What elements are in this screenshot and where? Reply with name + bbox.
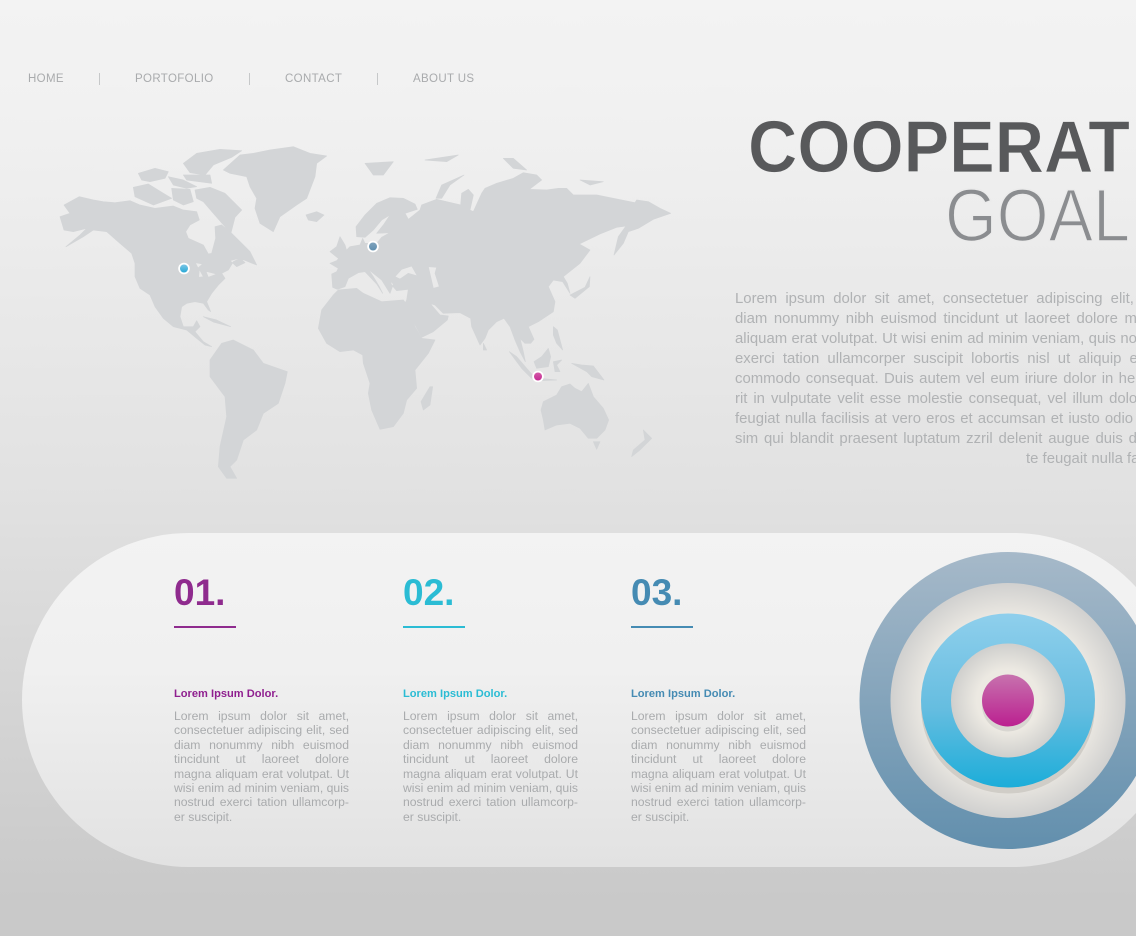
- body 02: diam nonummy nibh euismod: [403, 738, 578, 752]
- marker: Indonesia: [532, 371, 544, 382]
- Southeast Asian islands: [509, 327, 604, 381]
- body 03: [631, 709, 806, 824]
- body 02: wisi enim ad minim veniam, quis: [403, 781, 578, 795]
- body 03: diam nonummy nibh euismod: [631, 738, 806, 752]
- body 03: wisi enim ad minim veniam, quis: [631, 781, 806, 795]
- body 03: tincidunt ut laoreet dolore: [631, 752, 806, 766]
- body 03: Lorem ipsum dolor sit amet,: [631, 709, 806, 723]
- body 01: Lorem ipsum dolor sit amet,: [174, 709, 349, 723]
- world map: [60, 146, 671, 478]
- body 02: consectetuer adipiscing elit, sed: [403, 723, 578, 737]
- body 03: consectetuer adipiscing elit, sed: [631, 723, 806, 737]
- body 03: magna aliquam erat volutpat. Ut: [631, 767, 806, 781]
- outer blue-grey ring: [860, 552, 1136, 849]
- body 01: diam nonummy nibh euismod: [174, 738, 349, 752]
- Australia: [541, 383, 609, 449]
- UK and Ireland: [330, 237, 348, 258]
- Arctic Eurasian islands: [365, 155, 603, 198]
- body 01: [174, 709, 349, 824]
- heading 03: Lorem Ipsum Dolor.: [631, 688, 735, 700]
- centre magenta dot: [982, 674, 1034, 726]
- number 03: 03.: [631, 572, 682, 613]
- Greenland: [223, 147, 327, 232]
- blue ring: [921, 614, 1095, 788]
- nav item: home: HOME: [28, 73, 64, 85]
- underline 02: [403, 626, 465, 628]
- underline 03: [631, 626, 693, 628]
- number 02: 02.: [403, 572, 454, 613]
- nav item: contact: CONTACT: [285, 73, 342, 85]
- heading 01: Lorem Ipsum Dolor.: [174, 688, 278, 700]
- Eurasia: [330, 173, 671, 362]
- step 02: [403, 572, 578, 824]
- body 01: magna aliquam erat volutpat. Ut: [174, 767, 349, 781]
- body 02: magna aliquam erat volutpat. Ut: [403, 767, 578, 781]
- body 03: er suscipit.: [631, 810, 689, 824]
- New Zealand: [632, 430, 652, 457]
- body 01: consectetuer adipiscing elit, sed: [174, 723, 349, 737]
- nav separator: [377, 73, 378, 85]
- South America: [210, 340, 287, 478]
- continents: Europe, Asia, Africa, Oceania: [318, 155, 671, 457]
- panel: steps pill: [22, 533, 1136, 867]
- underline 01: [174, 626, 236, 628]
- navigation bar: [28, 73, 474, 85]
- step 01: [174, 572, 349, 824]
- marker: Europe: [367, 241, 379, 252]
- body 02: er suscipit.: [403, 810, 461, 824]
- North America: [60, 197, 257, 347]
- intro paragraph: [735, 290, 1136, 466]
- continents: Americas: [60, 147, 327, 478]
- inner cream ring: [951, 644, 1065, 758]
- body 02: [403, 709, 578, 824]
- nav item: about us: ABOUT US: [413, 73, 474, 85]
- nav separator: [249, 73, 250, 85]
- centre dot shadow: [982, 680, 1034, 732]
- body 02: Lorem ipsum dolor sit amet,: [403, 709, 578, 723]
- body 01: wisi enim ad minim veniam, quis: [174, 781, 349, 795]
- target graphic: [860, 552, 1136, 849]
- body 02: nostrud exerci tation ullamcorp-: [403, 795, 578, 809]
- Canadian Arctic islands: [133, 149, 242, 234]
- Madagascar: [421, 387, 433, 410]
- nav separator: [99, 73, 100, 85]
- body 03: nostrud exerci tation ullamcorp-: [631, 795, 806, 809]
- title: [748, 107, 1130, 257]
- nav item: portfolio: PORTOFOLIO: [135, 73, 214, 85]
- marker: North America: [178, 263, 190, 274]
- second cream ring: [890, 583, 1126, 818]
- Africa: [318, 288, 435, 429]
- Japan and Sri Lanka: [483, 277, 590, 350]
- body 02: tincidunt ut laoreet dolore: [403, 752, 578, 766]
- body 01: nostrud exerci tation ullamcorp-: [174, 795, 349, 809]
- Iceland: [306, 212, 324, 222]
- heading 02: Lorem Ipsum Dolor.: [403, 688, 507, 700]
- blue ring shadow: [921, 620, 1095, 794]
- step 03: [631, 572, 806, 824]
- number 01: 01.: [174, 572, 225, 613]
- body 01: er suscipit.: [174, 810, 232, 824]
- body 01: tincidunt ut laoreet dolore: [174, 752, 349, 766]
